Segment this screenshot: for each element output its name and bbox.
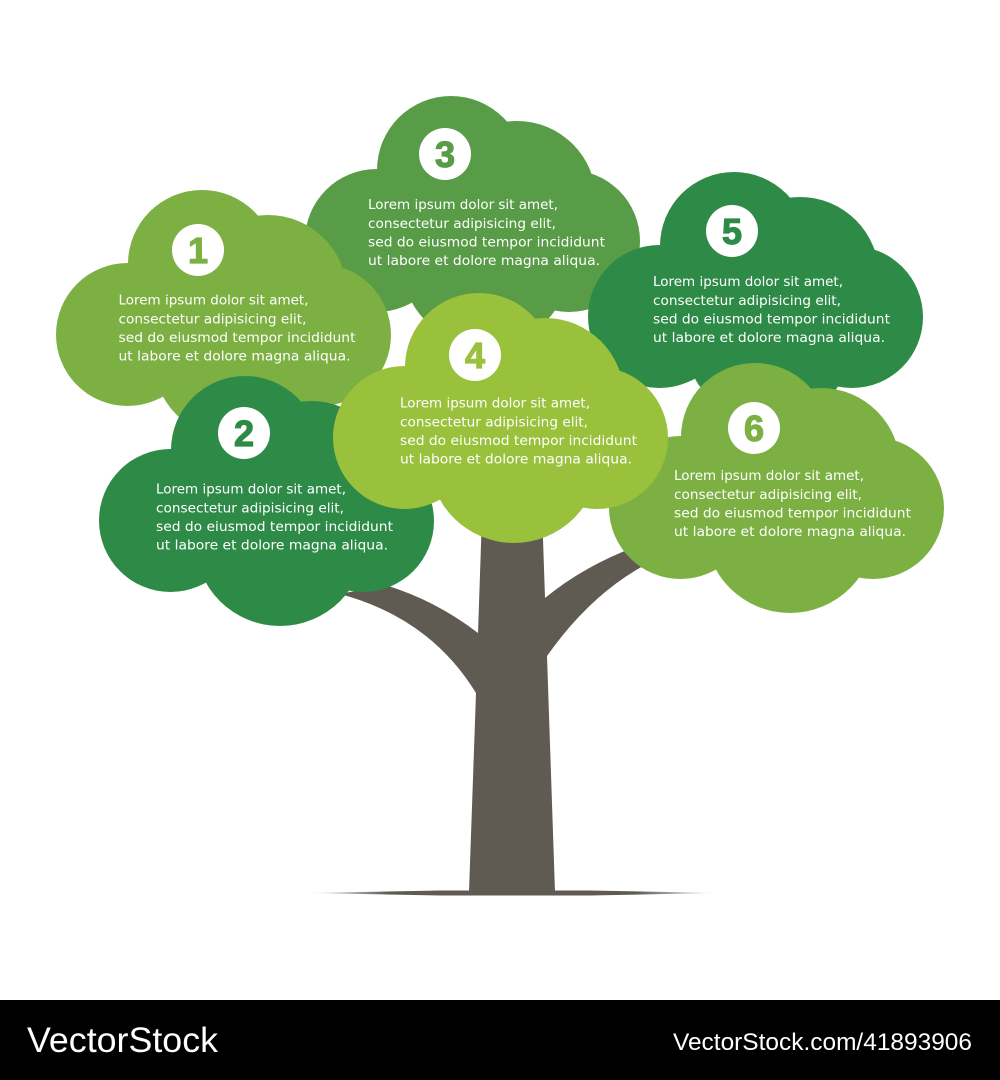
text block 3: sed do eiusmod tempor incididunt (368, 236, 605, 250)
text block 6: ut labore et dolore magna aliqua. (674, 525, 906, 540)
cloud 5 (588, 172, 923, 422)
text block 4: sed do eiusmod tempor incididunt (400, 434, 637, 449)
badge 1 (172, 224, 224, 276)
badge 6: 6 (744, 408, 764, 449)
badge 2 (218, 407, 270, 459)
footer logo: VectorStock (27, 1021, 219, 1060)
badge 1: 1 (188, 230, 208, 271)
ground shadow (307, 890, 718, 896)
badge 2: 2 (234, 413, 254, 454)
text block 1 (118, 294, 356, 364)
cloud 6 (609, 363, 944, 613)
text block 2: consectetur adipisicing elit, (156, 502, 344, 516)
footer url: VectorStock.com/41893906 (673, 1029, 972, 1056)
text block 3 (368, 198, 605, 269)
text block 2: ut labore et dolore magna aliqua. (156, 538, 388, 554)
text block 5 (653, 275, 890, 346)
text block 3: ut labore et dolore magna aliqua. (368, 254, 600, 269)
text block 1: consectetur adipisicing elit, (118, 312, 306, 328)
text block 1: sed do eiusmod tempor incididunt (118, 331, 356, 346)
text block 5: Lorem ipsum dolor sit amet, (653, 275, 843, 290)
text block 3: consectetur adipisicing elit, (368, 217, 556, 232)
footer bar (0, 1000, 1000, 1080)
cloud 3 (305, 96, 640, 346)
badge 6 (728, 402, 780, 454)
text block 2 (156, 482, 393, 554)
badge 5 (706, 205, 758, 257)
text block 5: ut labore et dolore magna aliqua. (653, 331, 885, 346)
badge 3 (419, 128, 471, 180)
text block 5: consectetur adipisicing elit, (653, 294, 841, 309)
text block 4: consectetur adipisicing elit, (400, 416, 588, 430)
text block 6: Lorem ipsum dolor sit amet, (674, 469, 864, 484)
text block 6 (674, 469, 911, 540)
text block 2: sed do eiusmod tempor incididunt (156, 520, 393, 535)
text block 6: consectetur adipisicing elit, (674, 488, 862, 503)
badge 4: 4 (465, 335, 485, 376)
tree trunk and branches (340, 530, 645, 892)
cloud 1 (56, 190, 391, 440)
cloud 2 (99, 376, 434, 626)
text block 4: ut labore et dolore magna aliqua. (400, 452, 632, 468)
text block 2: Lorem ipsum dolor sit amet, (156, 482, 346, 498)
badge 5: 5 (722, 211, 742, 252)
text block 6: sed do eiusmod tempor incididunt (674, 506, 911, 522)
text block 1: Lorem ipsum dolor sit amet, (118, 294, 308, 308)
cloud 4 (333, 293, 668, 543)
text block 5: sed do eiusmod tempor incididunt (653, 312, 890, 328)
text block 1: ut labore et dolore magna aliqua. (118, 350, 350, 364)
text block 4 (400, 396, 637, 468)
text block 4: Lorem ipsum dolor sit amet, (400, 396, 590, 412)
text block 3: Lorem ipsum dolor sit amet, (368, 198, 558, 213)
badge 3: 3 (435, 134, 455, 175)
badge 4 (449, 329, 501, 381)
